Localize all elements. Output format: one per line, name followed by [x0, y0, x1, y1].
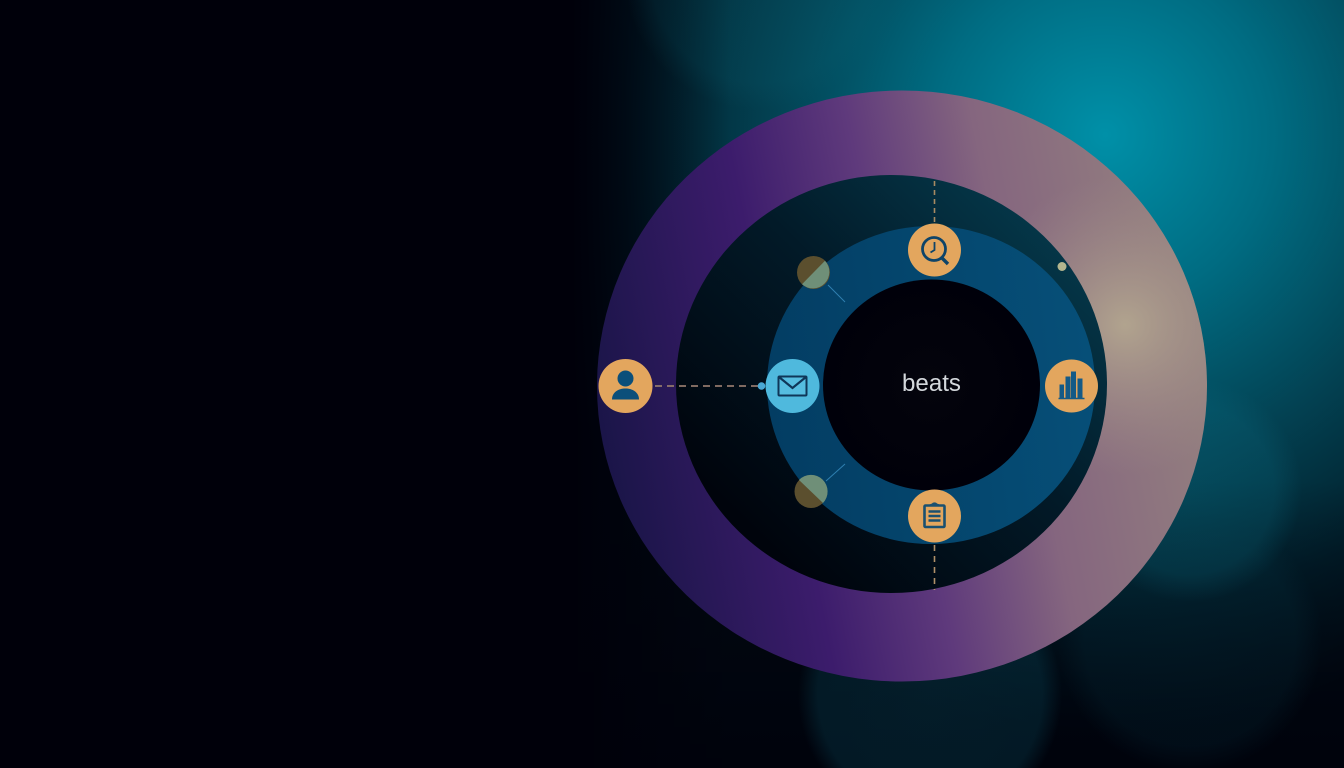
panel: central core — [823, 280, 1040, 490]
icon: clipboard — [908, 490, 961, 542]
icon: envelope — [766, 359, 820, 413]
icon: bar chart — [1045, 360, 1098, 412]
connector: bottom dashed line — [934, 545, 936, 590]
node: small dot — [1058, 262, 1066, 271]
connector: horizontal dashed line — [655, 382, 765, 390]
panel: outer ring — [597, 90, 1207, 682]
center label: beats — [902, 370, 961, 397]
node: upper translucent circle — [797, 256, 845, 302]
panel: dark middle ring — [676, 175, 1107, 593]
panel: blue ring — [767, 226, 1095, 544]
icon: clock magnifier — [908, 224, 961, 276]
icon: person — [598, 359, 652, 413]
connector: top dashed line — [934, 181, 936, 224]
node: lower translucent circle — [794, 464, 845, 508]
